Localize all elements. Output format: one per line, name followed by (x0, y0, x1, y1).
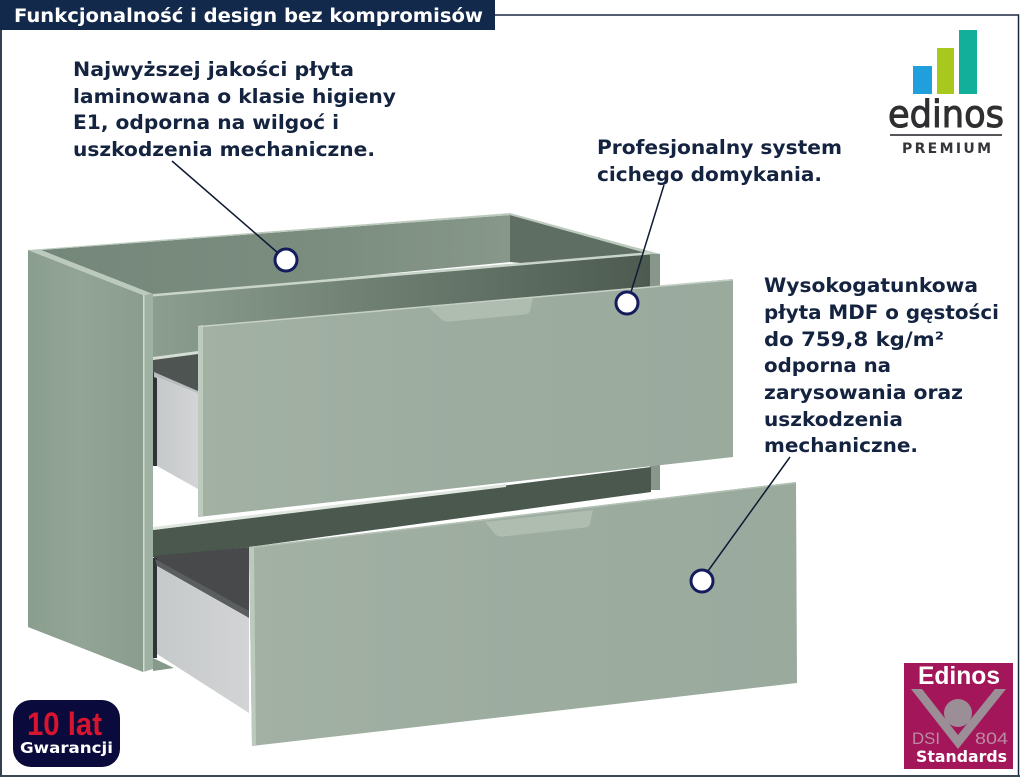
title banner: Funkcjonalność i design bez kompromisów (14, 6, 483, 27)
callout: soft close marker (616, 185, 664, 314)
callout: board marker (172, 161, 297, 271)
middle rail (153, 467, 651, 557)
upper drawer box (153, 351, 198, 489)
text block: MDF board: mechaniczne. (764, 434, 918, 457)
upper rail (153, 254, 650, 358)
logo: edinos premium (888, 30, 1004, 157)
text block: laminated board: E1, odporna na wilgoć i (73, 111, 339, 134)
logo: edinos premium: edinos (888, 93, 1004, 136)
text block: laminated board (73, 58, 396, 161)
badge: Edinos standards: 804 (975, 729, 1008, 748)
badge: Edinos standards: DSI (912, 729, 940, 748)
badge: Edinos standards (904, 662, 1013, 769)
cabinet illustration (28, 213, 797, 746)
text block: laminated board: uszkodzenia mechaniczne. (73, 138, 375, 161)
lower drawer handle (485, 510, 593, 537)
text block: MDF board: uszkodzenia (764, 408, 903, 431)
badge: 10 year warranty (13, 700, 120, 767)
logo: edinos premium: PREMIUM (902, 141, 991, 157)
badge: 10 year warranty: Gwarancji (20, 739, 113, 757)
text block: soft close system (597, 136, 842, 186)
title banner (0, 0, 495, 30)
upper drawer handle (428, 298, 533, 322)
text block: soft close system: cichego domykania. (597, 163, 822, 186)
badge: 10 year warranty: 10 lat (27, 706, 102, 742)
text block: MDF board: zarysowania oraz (764, 381, 963, 404)
text block: MDF board (764, 274, 999, 457)
cabinet inner right wall (510, 215, 650, 275)
text block: MDF board: Wysokogatunkowa (764, 274, 978, 297)
cabinet side panel (28, 250, 143, 672)
text block: MDF board: płyta MDF o gęstości (764, 301, 999, 324)
text block: laminated board: laminowana o klasie higieny (73, 85, 396, 108)
callout: MDF marker (691, 457, 790, 592)
cabinet right edge (650, 254, 660, 490)
badge: Edinos standards: Standards (916, 747, 1007, 766)
upper drawer front (198, 279, 733, 517)
cabinet top rim (28, 213, 660, 254)
lower drawer box (153, 547, 249, 713)
cabinet back wall (41, 215, 510, 296)
text block: MDF board: odporna na (764, 354, 891, 377)
text block: laminated board: Najwyższej jakości płyta (73, 58, 354, 81)
lower drawer front (249, 482, 797, 746)
text block: MDF board: do 759,8 kg/m² (764, 328, 944, 351)
badge: Edinos standards: Edinos (918, 662, 1000, 690)
text block: soft close system: Profesjonalny system (597, 136, 842, 159)
